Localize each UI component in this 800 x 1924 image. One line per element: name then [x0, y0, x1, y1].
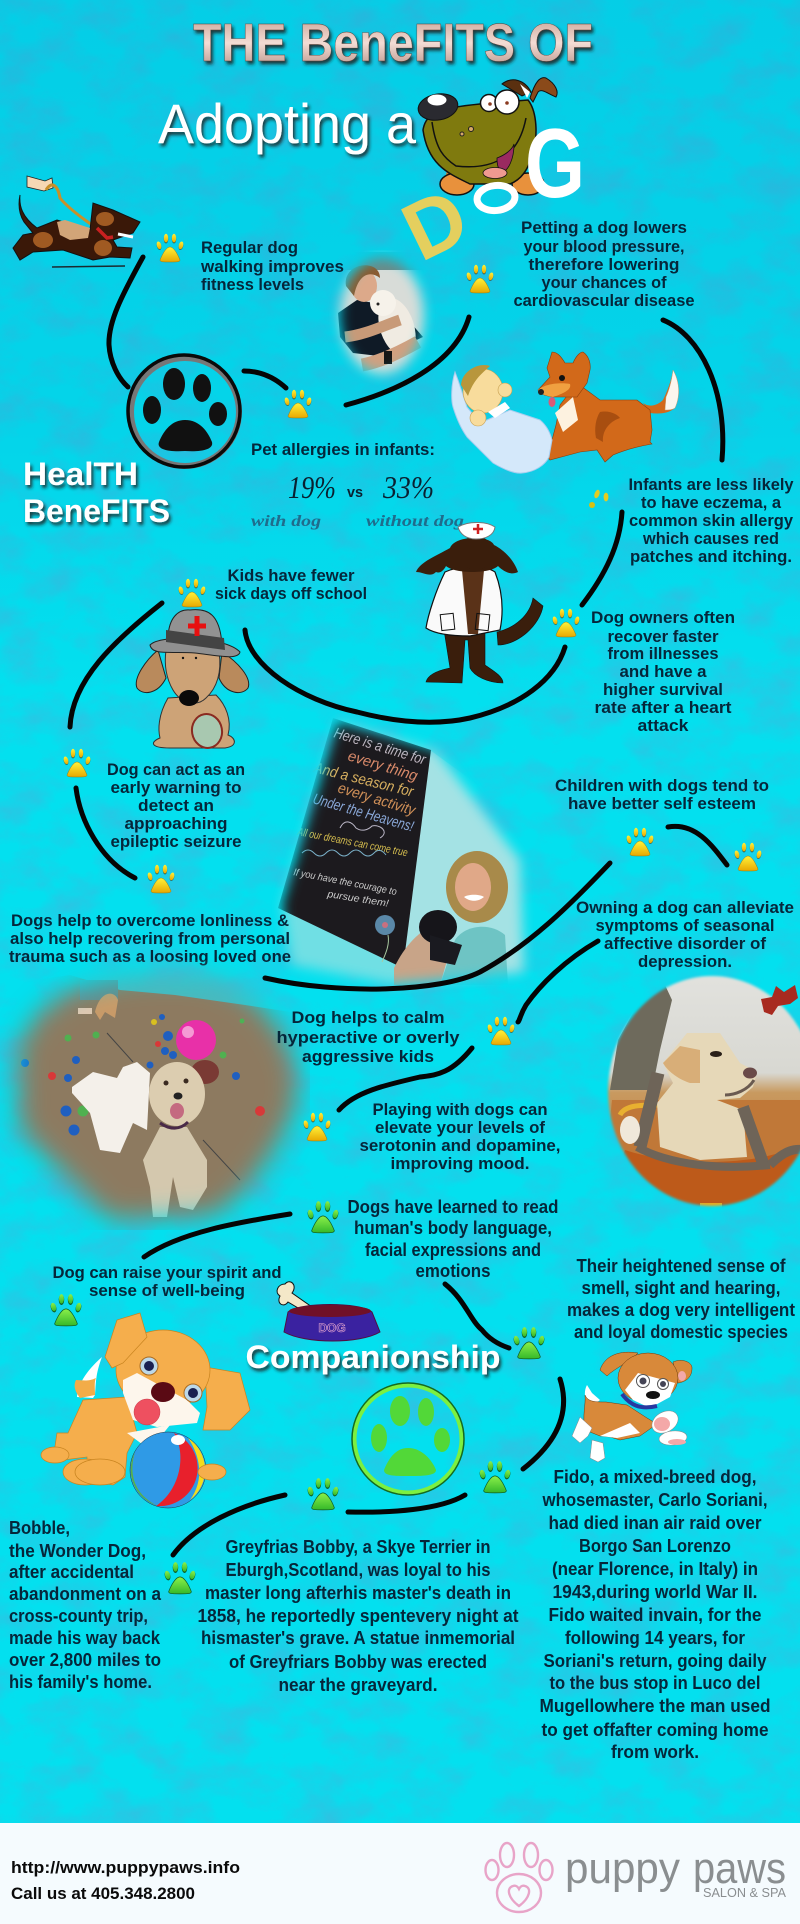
arrow arc: [445, 1284, 509, 1348]
text: body language: emotions: [416, 1261, 490, 1281]
photo: chalkboard and woman: Here is a time for: [332, 725, 428, 769]
arrow arc: [70, 603, 162, 727]
icon: red maple leaf: [761, 985, 798, 1015]
text: Fido story: whosemaster, Carlo Soriani,: [542, 1490, 768, 1510]
text: dog owners: rate after a heart: [594, 699, 732, 717]
title letter O: [476, 184, 516, 212]
arrow arc: [265, 863, 610, 989]
arrow arc: [76, 788, 135, 878]
text: kids sick days: sick days off school: [215, 585, 367, 603]
text: Bobble story: [9, 1518, 162, 1692]
text: epileptic seizure: detect an: [138, 797, 214, 815]
text: raise spirit: [52, 1264, 282, 1300]
text: epileptic seizure: Dog can act as an: [107, 761, 245, 779]
text: petting: cardiovascular disease: [514, 292, 694, 310]
illustration: baby with orange dog: [452, 352, 679, 473]
footer contact text: Call us at 405.348.2800: [11, 1884, 195, 1903]
photo: chalkboard and woman: All our dreams can come true: [296, 826, 409, 859]
text: Bobble story: over 2,800 miles to: [9, 1650, 161, 1670]
text: eczema: which causes red: [642, 530, 779, 548]
text: Bobble story: made his way back: [9, 1628, 161, 1648]
text: self esteem: Children with dogs tend to: [555, 777, 769, 795]
icon: green paw: [513, 1327, 545, 1359]
text: pet allergies stat: 19%: [288, 469, 336, 505]
text: Greyfriars Bobby story: hismaster's grave. A statue inmemorial: [201, 1628, 515, 1648]
text: Greyfriars Bobby story: of Greyfriars Bobby was erected: [229, 1652, 487, 1672]
icon: paw: [626, 828, 654, 856]
arrow arc: [668, 826, 727, 865]
icon: paw: [734, 843, 762, 871]
title letter G: G: [525, 108, 585, 218]
text: eczema: common skin allergy: [629, 512, 794, 530]
icon: bone in dog bowl: DOG: [318, 1321, 346, 1335]
text: dog owners: and have a: [620, 663, 707, 681]
text: calm hyperactive kids: aggressive kids: [302, 1048, 434, 1066]
text: pet allergies stat: Pet allergies in infants:: [251, 441, 435, 459]
text: Greyfriars Bobby story: 1858, he reportedly spentevery night at: [198, 1606, 518, 1626]
text: Fido story: Soriani's return, going daily: [544, 1651, 766, 1671]
icon: paw: [552, 609, 580, 637]
text: epileptic seizure: epileptic seizure: [110, 833, 242, 851]
heading: health benefits: [23, 456, 170, 529]
text: playing with dogs: [360, 1101, 560, 1173]
text: eczema: [628, 476, 794, 566]
text: playing with dogs: Playing with dogs can: [372, 1101, 548, 1119]
arrow arc: [245, 630, 565, 722]
arrow arc: [346, 317, 469, 405]
text: playing with dogs: elevate your levels of: [375, 1119, 546, 1137]
text: calm hyperactive kids: [276, 1009, 460, 1066]
text: heightened sense: smell, sight and hearing,: [582, 1278, 780, 1298]
text: body language: human's body language,: [354, 1218, 552, 1238]
text: kids sick days: [215, 567, 367, 603]
text: eczema: to have eczema, a: [641, 494, 782, 512]
arrow arc: [663, 320, 723, 460]
text: seasonal affective disorder: depression.: [638, 953, 732, 971]
text: Fido story: to get offafter coming home: [542, 1720, 768, 1740]
arrow arc: [523, 1379, 564, 1469]
text: Fido story: had died inan air raid over: [548, 1513, 762, 1533]
illustration: dog with hat and magnifying glass: [136, 610, 249, 750]
icon: small paw: [589, 489, 608, 508]
text: seasonal affective disorder: affective disorder of: [604, 935, 767, 953]
photo: chalkboard and woman: [270, 710, 540, 1000]
icon: green paw: [479, 1461, 511, 1493]
text: raise spirit: sense of well-being: [89, 1282, 245, 1300]
text: Bobble story: the Wonder Dog,: [9, 1541, 146, 1561]
text: playing with dogs: improving mood.: [390, 1155, 530, 1173]
text: loneliness: [9, 912, 291, 966]
text: pet allergies stat: without dog: [366, 513, 464, 530]
text: calm hyperactive kids: hyperactive or overly: [276, 1029, 460, 1047]
logo: pink paw outline: [486, 1843, 552, 1912]
text: Fido story: Fido, a mixed-breed dog,: [554, 1467, 756, 1487]
text: heightened sense: [567, 1256, 795, 1342]
icon: paw: [178, 579, 206, 607]
text: heightened sense: Their heightened sense of: [576, 1256, 786, 1276]
text: dog walking: [200, 239, 344, 294]
text: Bobble story: after accidental: [9, 1562, 134, 1582]
photo: chalkboard and woman: every thing: [346, 748, 420, 785]
text: loneliness: also help recovering from personal: [10, 930, 290, 948]
icon: bone in dog bowl: [277, 1282, 380, 1341]
icon: dog on a leash: [13, 176, 140, 267]
text: Greyfriars Bobby story: Greyfrias Bobby, a Skye Terrier in: [226, 1537, 490, 1557]
text: Fido story: (near Florence, in Italy) in: [552, 1559, 758, 1579]
title: Adopting a: Adopting a: [158, 92, 417, 155]
text: seasonal affective disorder: [576, 899, 794, 971]
text: petting: Petting a dog lowers: [521, 219, 687, 237]
text: Fido story: 1943,during world War II.: [552, 1582, 758, 1602]
text: dog owners: higher survival: [603, 681, 723, 699]
text: eczema: patches and itching.: [630, 548, 792, 566]
logo: puppy paws wordmark: [565, 1844, 786, 1900]
title: The Benefits Of: THE BeneFITS OF: [193, 13, 593, 73]
text: Greyfriars Bobby story: Eburgh,Scotland, was loyal to his: [226, 1560, 490, 1580]
text: pet allergies stat: [251, 441, 464, 530]
heading: health benefits: BeneFITS: [23, 493, 170, 529]
text: Bobble story: Bobble,: [9, 1518, 70, 1538]
heading: companionship: Companionship: [246, 1339, 500, 1375]
text: calm hyperactive kids: Dog helps to calm: [292, 1009, 444, 1027]
text: seasonal affective disorder: symptoms of seasonal: [596, 917, 774, 935]
arrow arc: [582, 512, 622, 605]
text: body language: [348, 1197, 558, 1281]
arrow arc: [173, 1495, 285, 1555]
photo: chalkboard and woman: pursue them!: [325, 889, 390, 910]
text: Fido story: [540, 1467, 770, 1762]
text: epileptic seizure: early warning to: [110, 779, 242, 797]
logo: puppy paws wordmark: SALON & SPA: [703, 1885, 786, 1900]
text: body language: facial expressions and: [365, 1240, 541, 1260]
text: Fido story: from work.: [611, 1742, 699, 1762]
text: Bobble story: his family's home.: [9, 1672, 152, 1692]
photo: chalkboard and woman: Under the Heavens!: [311, 791, 416, 836]
text: Greyfriars Bobby story: near the graveyard.: [278, 1675, 438, 1695]
text: loneliness: trauma such as a loosing loved one: [9, 948, 291, 966]
text: Fido story: Borgo San Lorenzo: [579, 1536, 731, 1556]
text: loneliness: Dogs help to overcome lonliness &: [11, 912, 289, 930]
text: dog walking: Regular dog: [201, 239, 298, 257]
text: body language: Dogs have learned to read: [348, 1197, 558, 1217]
icon: green paw: [307, 1478, 339, 1510]
arrow arc: [144, 1214, 290, 1257]
footer contact text: http://www.puppypaws.info: [11, 1858, 240, 1877]
text: pet allergies stat: 33%: [382, 469, 434, 505]
paw circle: companionship: [352, 1383, 464, 1495]
icon: paw: [147, 865, 175, 893]
text: epileptic seizure: approaching: [124, 815, 228, 833]
text: Fido story: Fido waited invain, for the: [548, 1605, 762, 1625]
icon: paw: [156, 234, 184, 262]
text: dog owners: recover faster: [608, 628, 719, 646]
text: Greyfriars Bobby story: [198, 1537, 518, 1695]
text: raise spirit: Dog can raise your spirit and: [52, 1264, 282, 1282]
arrow arc: [244, 371, 286, 388]
text: dog walking: fitness levels: [201, 276, 304, 294]
icon: paw: [487, 1017, 515, 1045]
logo: puppy paws wordmark: paws: [693, 1844, 786, 1893]
photo: chalkboard and woman: every activity: [336, 780, 419, 820]
text: Fido story: following 14 years, for: [565, 1628, 745, 1648]
photo: woman holding white dog: [330, 250, 434, 384]
text: pet allergies stat: with dog: [251, 513, 321, 530]
text: pet allergies stat: vs: [347, 484, 363, 501]
icon: paw: [466, 265, 494, 293]
text: dog owners: attack: [638, 717, 689, 735]
text: dog walking: walking improves: [200, 258, 344, 276]
icon: green paw: [50, 1294, 82, 1326]
arrow arc: [348, 1495, 465, 1512]
text: petting: your chances of: [542, 274, 667, 292]
photo: golden retriever in autumn leaves: [600, 970, 800, 1215]
text: petting: your blood pressure,: [524, 238, 684, 256]
photo: chalkboard and woman: And a season for: [311, 759, 416, 801]
heading: health benefits: HealTH: [23, 456, 138, 492]
text: epileptic seizure: [107, 761, 245, 851]
icon: green paw: [307, 1201, 339, 1233]
logo: puppy paws wordmark: puppy: [565, 1844, 680, 1893]
illustration: nurse dog: [416, 522, 543, 683]
text: self esteem: have better self esteem: [568, 795, 756, 813]
icon: green paw: [164, 1562, 196, 1594]
text: seasonal affective disorder: Owning a dog can alleviate: [576, 899, 794, 917]
icon: paw: [284, 390, 312, 418]
text: eczema: Infants are less likely: [628, 476, 794, 494]
text: Bobble story: abandonment on a: [9, 1584, 162, 1604]
text: petting: therefore lowering: [528, 256, 680, 274]
photo: chalkboard and woman: If you have the courage to: [292, 867, 398, 898]
icon: olive cartoon dog head: [416, 78, 557, 195]
icon: paw: [303, 1113, 331, 1141]
photo: dogs playing with balls: [0, 960, 310, 1230]
illustration: running puppy: [572, 1352, 692, 1462]
text: Bobble story: cross-county trip,: [9, 1606, 148, 1626]
paw circle: health: [128, 355, 240, 467]
text: playing with dogs: serotonin and dopamine,: [360, 1137, 560, 1155]
icon: paw: [63, 749, 91, 777]
arrow arc: [518, 941, 598, 1022]
footer contact text: [11, 1858, 240, 1903]
text: dog owners: from illnesses: [608, 645, 718, 663]
text: Fido story: to the bus stop in Luco del: [550, 1673, 760, 1693]
text: kids sick days: Kids have fewer: [228, 567, 355, 585]
text: dog owners: [591, 609, 735, 735]
title letter D: D: [389, 171, 482, 279]
text: self esteem: [555, 777, 769, 813]
arrow arc: [109, 257, 143, 387]
text: dog owners: Dog owners often: [591, 609, 735, 627]
illustration: orange puppy with beach ball: [41, 1313, 250, 1508]
footer panel: [0, 1823, 800, 1924]
text: petting: [514, 219, 694, 310]
text: Greyfriars Bobby story: master long afterhis master's death in: [205, 1583, 511, 1603]
arrow arc: [339, 1048, 472, 1110]
text: Fido story: Mugellowhere the man used: [540, 1696, 770, 1716]
